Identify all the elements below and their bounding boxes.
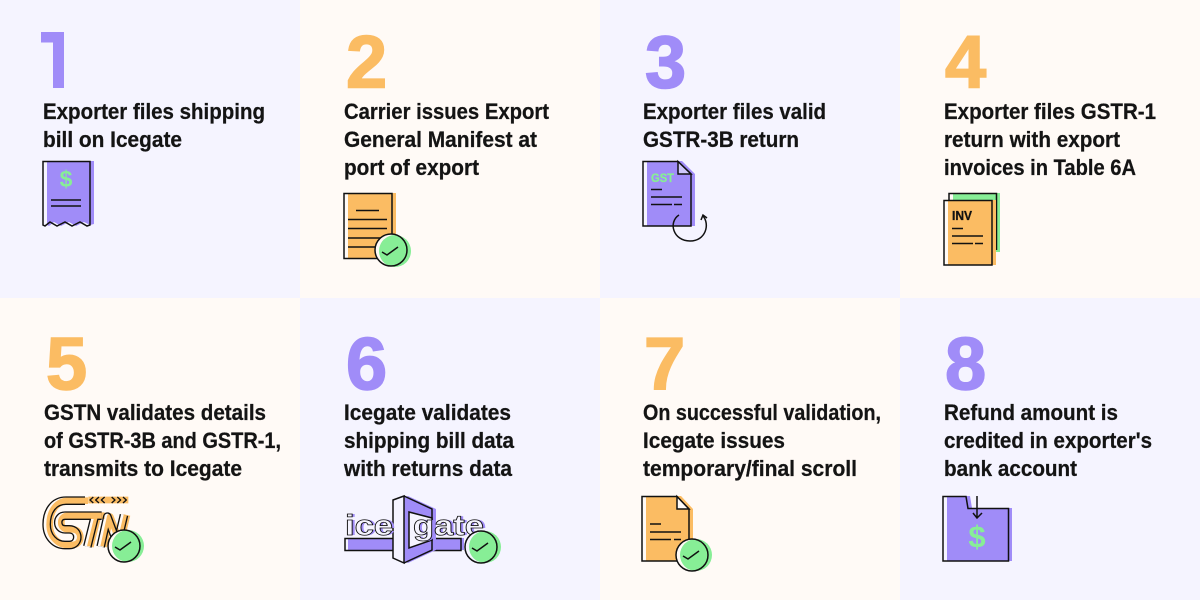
icon: Icegate logo with check: gate (413, 510, 484, 542)
number 1: 1 (38, 20, 79, 104)
heading: step 5 (44, 400, 281, 481)
heading: step 5: of GSTR-3B and GSTR-1, (44, 428, 281, 453)
heading: step 7: On successful validation, (643, 400, 881, 425)
heading: step 6 (343, 400, 515, 481)
heading: step 4 (944, 99, 1156, 180)
icon: invoice documents (944, 193, 1000, 265)
heading: step 8: credited in exporter's (944, 428, 1152, 453)
heading: step 3 (643, 99, 826, 152)
panel: step 8 (900, 298, 1200, 600)
heading: step 6: with returns data (343, 456, 513, 481)
icon: Icegate logo with check (345, 496, 501, 563)
heading: step 7: Icegate issues (643, 428, 785, 453)
heading: step 5: transmits to Icegate (44, 456, 242, 481)
heading: step 3: Exporter files valid (643, 99, 826, 124)
number 3: 3 (645, 20, 686, 104)
heading: step 8: Refund amount is (944, 400, 1118, 425)
heading: step 1: bill on Icegate (43, 127, 182, 152)
icon: GSTN logo with check (47, 497, 144, 562)
panel: step 6 (300, 298, 600, 600)
icon: Icegate logo with check: ice (348, 510, 396, 542)
icon: export manifest document with check (344, 193, 411, 267)
number 6: 6 (346, 322, 387, 406)
icon: invoice documents: INV (952, 208, 972, 223)
heading: step 8 (944, 400, 1152, 481)
icon: Icegate logo with check: gate (416, 510, 486, 542)
icon: GST return document with cycle arrow (643, 161, 707, 241)
number 5: 5 (46, 322, 87, 406)
number 7: 7 (644, 322, 685, 406)
icon: refund folder with arrow (943, 496, 1012, 561)
panel: step 7 (600, 298, 900, 600)
heading: step 6: Icegate validates (344, 400, 511, 425)
panel: step 3 (600, 0, 900, 298)
number 1 (41, 32, 64, 88)
panel: step 5 (42, 337, 280, 563)
icon: shipping bill receipt: $ (60, 166, 73, 192)
number 4: 4 (945, 20, 986, 104)
heading: step 4: invoices in Table 6A (944, 155, 1136, 180)
icon: scroll document with check (642, 496, 712, 571)
heading: step 4: return with export (944, 127, 1121, 152)
heading: step 1: Exporter files shipping (43, 99, 265, 124)
heading: step 8: bank account (944, 456, 1078, 481)
heading: step 5: GSTN validates details (44, 400, 266, 425)
icon: shipping bill receipt (43, 161, 94, 226)
heading: step 2: General Manifest at (344, 127, 538, 152)
heading: step 7: temporary/final scroll (643, 456, 857, 481)
heading: step 2 (344, 99, 550, 180)
heading: step 1 (43, 99, 265, 152)
panel: step 4 (900, 0, 1200, 298)
heading: step 2: port of export (344, 155, 480, 180)
heading: step 4: Exporter files GSTR-1 (944, 99, 1156, 124)
heading: step 3: GSTR-3B return (643, 127, 799, 152)
icon: refund folder with arrow: $ (968, 519, 986, 554)
panel: step 2 (300, 0, 600, 298)
icon: Icegate logo with check: ice (345, 510, 393, 542)
heading: step 7 (643, 400, 881, 481)
heading: step 6: shipping bill data (344, 428, 515, 453)
number 8: 8 (945, 322, 986, 406)
panel: step 1 (0, 0, 300, 298)
number 2: 2 (346, 20, 387, 104)
heading: step 2: Carrier issues Export (344, 99, 550, 124)
icon: GST return document with cycle arrow: GST (651, 171, 675, 185)
